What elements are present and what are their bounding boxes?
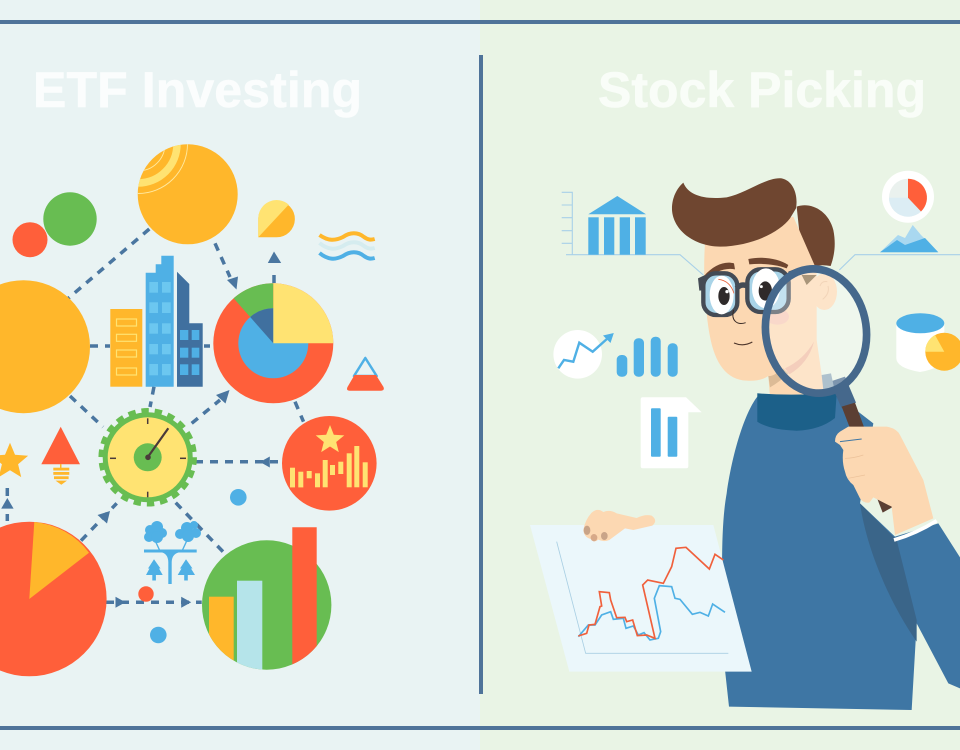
mouth: [734, 342, 752, 345]
line: red series: [578, 547, 723, 638]
icon: red dot: [138, 586, 154, 602]
icon: pie and mountain: [839, 171, 960, 270]
icon: orange star: [0, 443, 28, 477]
chart: four blue bars: [617, 337, 678, 377]
hand holding magnifier: [835, 427, 937, 540]
icon: trees: [144, 521, 201, 584]
chart: red pie with orange wedge: [0, 522, 107, 676]
chart: green circle with bars: [202, 527, 331, 677]
icon: city buildings: [110, 256, 203, 387]
icon: flask triangle: [347, 358, 384, 391]
icon: document with bars: [641, 397, 702, 468]
nose: [733, 310, 746, 323]
hand on sheet: [583, 510, 655, 541]
arrowheads: [1, 252, 281, 608]
icon: trend line in white circle: [553, 330, 614, 379]
icon: database with pie: [896, 313, 960, 372]
head: [672, 178, 837, 397]
icon: blue dot lower: [150, 627, 167, 643]
icon: gauge gear: [101, 411, 194, 504]
sweater: [722, 395, 960, 710]
collar: [757, 393, 837, 431]
icon: droplet pie: [258, 200, 295, 237]
icon: blue dot: [230, 489, 247, 506]
title: ETF Investing: ETF Investing: [33, 62, 362, 118]
eyebrows: [704, 263, 735, 279]
figure: man with magnifying glass: [672, 178, 960, 710]
handle: [830, 377, 893, 513]
icon: small red circle: [12, 222, 48, 257]
icon: bank on ruler: [562, 192, 703, 275]
icon: red circle with star and bars: [282, 416, 377, 511]
magnifying glass lens: [757, 262, 875, 400]
icon: waves: [320, 233, 375, 259]
glasses: [698, 275, 707, 291]
icon: triangle bulb: [41, 427, 80, 485]
panel: stock picking illustration: [530, 171, 960, 710]
panel: ETF investing network diagram: [0, 94, 384, 677]
chart: donut and pie: [213, 283, 333, 403]
icon: large orange circle: [0, 280, 90, 413]
chart sheet held by hand: [530, 510, 752, 672]
title: Stock Picking: Stock Picking: [598, 62, 926, 118]
icon: green circle: [43, 192, 97, 246]
icon: top orange circle with rings: [138, 144, 238, 244]
dashed connectors: [7, 229, 304, 602]
line: blue series: [578, 586, 725, 640]
